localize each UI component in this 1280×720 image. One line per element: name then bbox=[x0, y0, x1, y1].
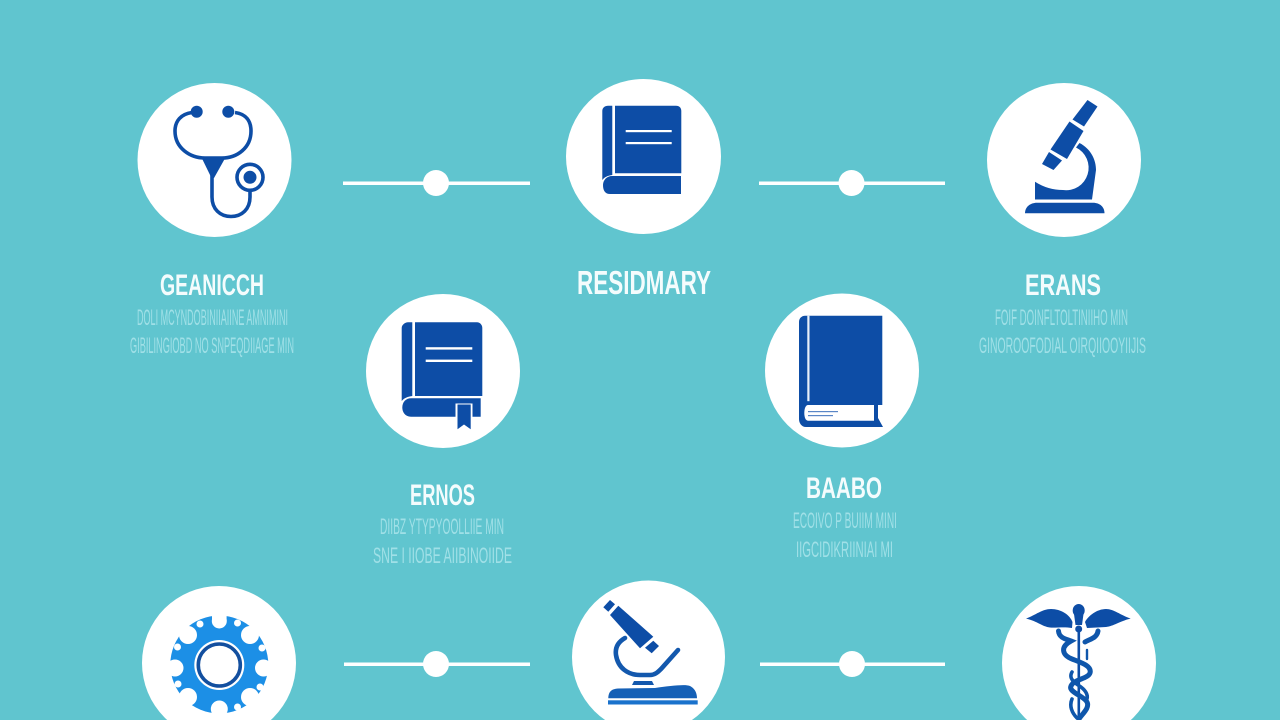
connector: bottom left bbox=[344, 651, 530, 677]
panel: gear step bbox=[142, 586, 296, 720]
panel: bookmarked book step bbox=[366, 294, 520, 568]
text block: step five line two: IIGCIDIKRIINIAI MI bbox=[796, 537, 893, 562]
panel: caduceus step bbox=[1002, 586, 1156, 720]
icon: lab microscope bbox=[603, 600, 698, 704]
icon: stethoscope bbox=[175, 106, 263, 216]
heading: step five: BAABO bbox=[806, 472, 882, 505]
text: GIBILINGIOBD NO SNPEQDIIAGE MIN bbox=[130, 333, 294, 358]
panel: stethoscope step bbox=[130, 83, 294, 358]
heading: step four: ERNOS bbox=[410, 479, 475, 512]
text: DOLI MCYNDOBINIIAIINE AMNIMINI bbox=[137, 305, 288, 330]
panel: microscope step bbox=[979, 83, 1146, 358]
panel: closed book step: ECOIVO P BUIIM MINI bbox=[793, 508, 897, 533]
panel: bookmarked book step: DIIBZ YTYPYOOLLIIE MIN bbox=[380, 514, 504, 539]
panel: lab microscope step bbox=[572, 580, 725, 720]
connector: top right bbox=[759, 170, 945, 196]
heading: step one: GEANICCH bbox=[160, 269, 264, 302]
connector: bottom right bbox=[760, 651, 945, 677]
icon: caduceus bbox=[1026, 604, 1131, 720]
heading: step three: ERANS bbox=[1025, 269, 1101, 302]
heading: step two: RESIDMARY bbox=[577, 264, 711, 301]
panel: closed book step bbox=[765, 294, 919, 562]
connector: top left bbox=[343, 170, 530, 196]
icon: gear bbox=[166, 612, 272, 718]
icon: microscope bbox=[1025, 100, 1104, 213]
icon: book bbox=[602, 106, 681, 194]
panel: book step bbox=[566, 79, 721, 301]
icon: closed book bbox=[799, 316, 883, 427]
icon: book with bookmark bbox=[402, 322, 482, 431]
text block: step four line two: SNE I IIOBE AIIBINOIIDE bbox=[373, 543, 512, 568]
